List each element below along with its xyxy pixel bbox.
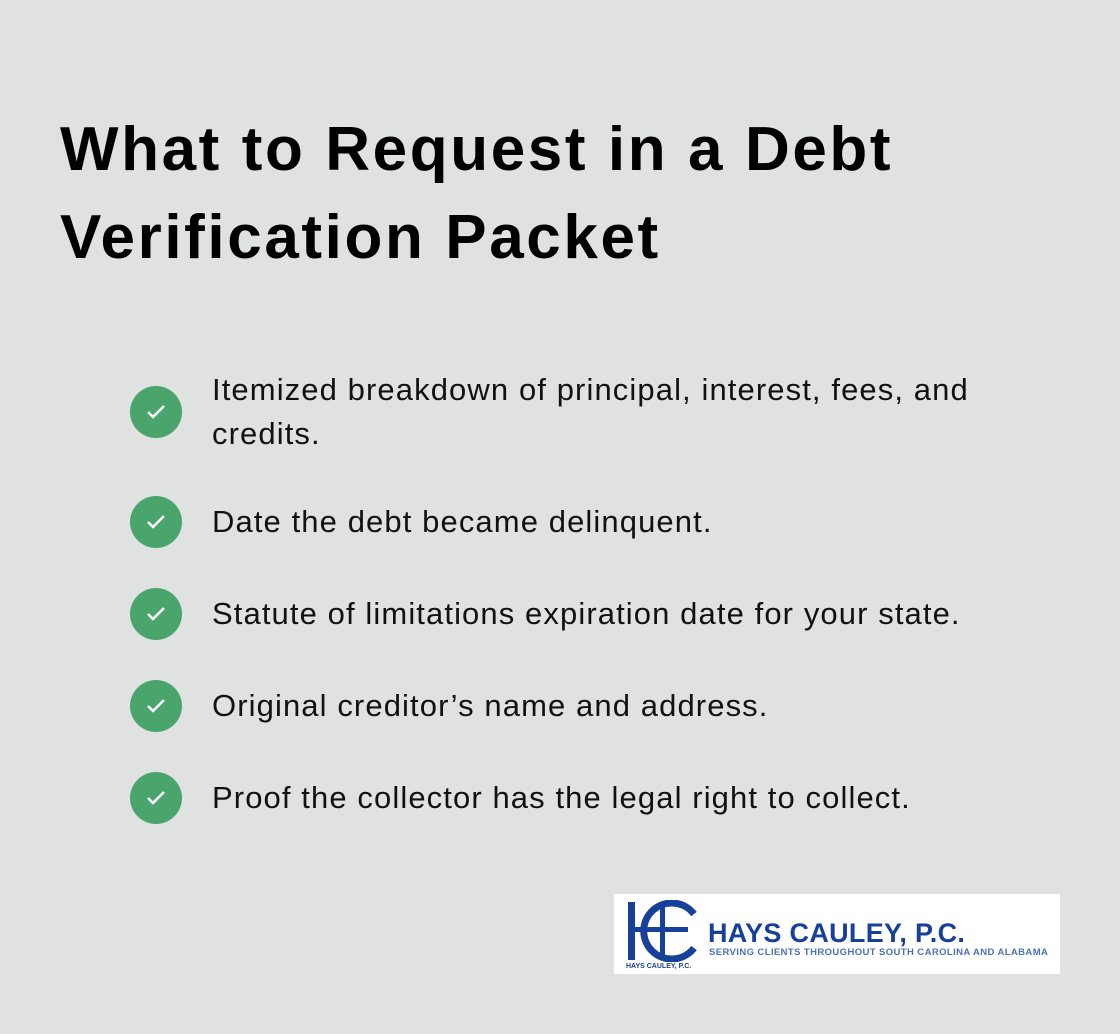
- icon: check: [130, 496, 182, 548]
- item 2: [130, 496, 713, 548]
- icon: check: [130, 588, 182, 640]
- text: Itemized breakdown of principal, interest, fees, and credits.: [212, 372, 969, 451]
- text: Original creditor’s name and address.: [212, 688, 768, 723]
- text: Date the debt became delinquent.: [212, 504, 713, 539]
- logo name: HAYS CAULEY, P.C.: [708, 918, 965, 948]
- text: Proof the collector has the legal right to collect.: [212, 780, 911, 815]
- item 1: [130, 372, 969, 451]
- icon: check: [130, 386, 182, 438]
- logo: HAYS CAULEY, P.C.: [626, 963, 691, 970]
- text: Statute of limitations expiration date for your state.: [212, 596, 961, 631]
- item 5: [130, 772, 911, 824]
- icon: check: [130, 772, 182, 824]
- title: Verification Packet: [60, 203, 661, 272]
- logo mark: [628, 900, 697, 962]
- title: [60, 115, 893, 272]
- icon: check: [130, 680, 182, 732]
- item 3: [130, 588, 961, 640]
- logo: [614, 894, 1060, 974]
- item 4: [130, 680, 768, 732]
- logo tagline: SERVING CLIENTS THROUGHOUT SOUTH CAROLINA AND ALABAMA: [709, 947, 1048, 958]
- title: What to Request in a Debt: [60, 115, 893, 184]
